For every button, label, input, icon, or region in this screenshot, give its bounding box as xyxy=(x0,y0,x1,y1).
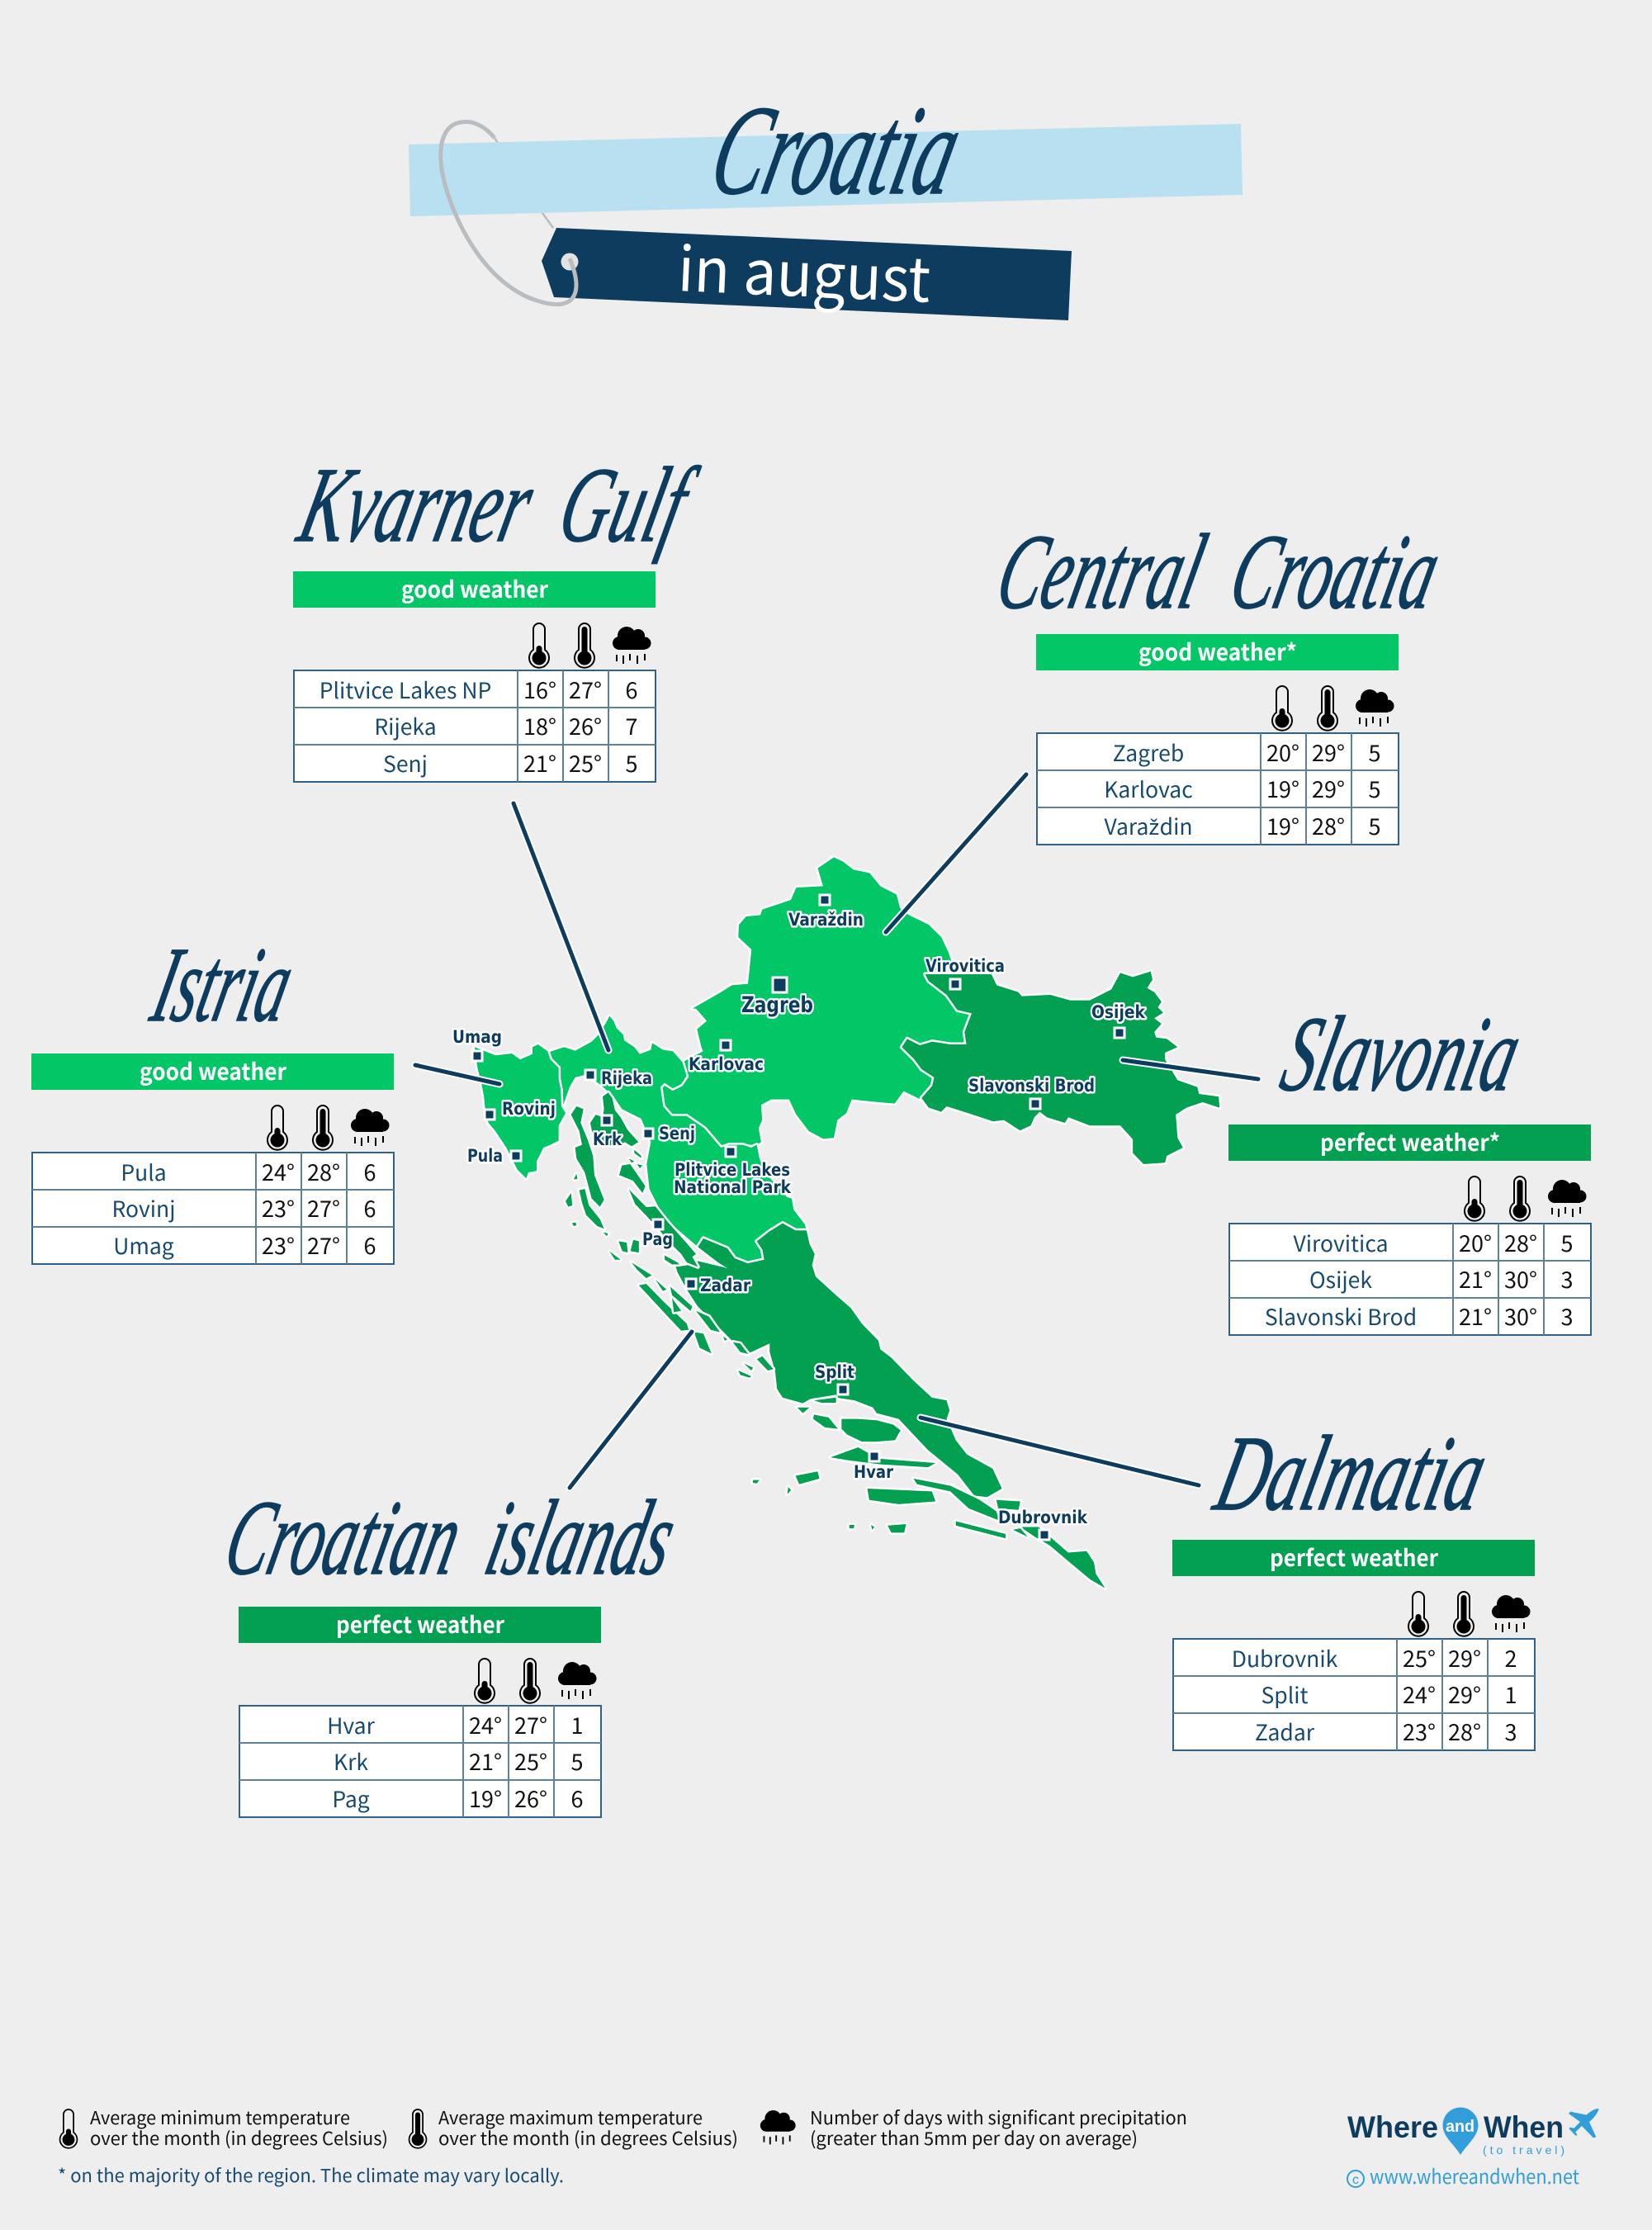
table xyxy=(1229,1224,1591,1335)
city labels: Rijeka xyxy=(601,1068,652,1088)
city labels: Osijek xyxy=(1091,1002,1146,1022)
city labels: Pula xyxy=(467,1146,503,1166)
table: 27° xyxy=(307,1229,340,1261)
legend text: precipitation: Number of days with significant precipitation xyxy=(810,2104,1187,2130)
table: 23° xyxy=(262,1191,295,1224)
table: Rovinj xyxy=(111,1191,176,1224)
table: 29° xyxy=(1312,772,1345,804)
table: 26° xyxy=(514,1782,547,1814)
panel: Croatian islands xyxy=(239,1607,601,1817)
legend icon: maximum temperature xyxy=(409,2109,426,2148)
footnote: * on the majority of the region. The climate may vary locally. xyxy=(58,2161,564,2188)
subtitle tag xyxy=(542,228,1072,320)
leader line: Dalmatia xyxy=(921,1418,1199,1485)
icons xyxy=(1408,1592,1531,1636)
legend text: maximum temperature: over the month (in degrees Celsius) xyxy=(438,2124,738,2151)
leader line: Kvarner Gulf xyxy=(514,803,608,1050)
city labels: Senj xyxy=(659,1124,695,1143)
panel: Kvarner Gulf xyxy=(293,571,656,782)
weather banner xyxy=(293,571,656,608)
leader line: Istria xyxy=(415,1065,499,1084)
region: Kvarner Gulf xyxy=(550,1016,807,1263)
city labels: Slavonski Brod xyxy=(968,1076,1095,1096)
logo: Where and When: and xyxy=(1446,2118,1474,2136)
legend text: precipitation: (greater than 5mm per day on average) xyxy=(810,2124,1138,2151)
table: 5 xyxy=(1369,736,1380,768)
weather banner xyxy=(1036,634,1399,670)
title text: Croatia xyxy=(698,80,974,221)
table: Pag xyxy=(332,1782,370,1814)
table: 6 xyxy=(626,673,637,705)
table xyxy=(1173,1639,1535,1750)
table: 3 xyxy=(1560,1262,1574,1295)
legend icon: precipitation xyxy=(760,2110,796,2144)
table: 5 xyxy=(1369,772,1380,804)
table: Karlovac xyxy=(1104,772,1193,804)
table: 27° xyxy=(307,1191,340,1224)
city labels: Krk xyxy=(593,1129,622,1149)
table: 25° xyxy=(514,1745,547,1777)
table: 3 xyxy=(1504,1715,1517,1747)
table: Zagreb xyxy=(1113,736,1184,768)
weather banner xyxy=(1228,1124,1591,1161)
city labels: Umag xyxy=(452,1027,502,1047)
weather banner xyxy=(1172,1540,1535,1576)
table: 21° xyxy=(1459,1262,1492,1295)
table: 6 xyxy=(363,1191,376,1224)
table: 28° xyxy=(307,1155,340,1187)
heading: Kvarner Gulf: Kvarner Gulf xyxy=(288,445,708,565)
northern islands xyxy=(566,1092,646,1236)
panel: Central Croatia xyxy=(1036,634,1399,845)
subtitle text: in august xyxy=(676,220,933,320)
tag string xyxy=(441,122,576,305)
table: 19° xyxy=(469,1782,502,1814)
table: 24° xyxy=(1403,1678,1436,1710)
weather banner: perfect weather xyxy=(1270,1541,1439,1574)
table: Virovitica xyxy=(1294,1226,1388,1258)
table: 23° xyxy=(1403,1715,1436,1747)
legend text: precipitation xyxy=(810,2104,1187,2151)
table: 30° xyxy=(1504,1262,1537,1295)
city labels: Split xyxy=(815,1362,854,1382)
city labels: Karlovac xyxy=(689,1054,764,1074)
leader line: Croatian islands xyxy=(570,1332,692,1488)
table: 27° xyxy=(569,673,602,705)
table: Pula xyxy=(121,1155,167,1187)
table: 5 xyxy=(571,1745,583,1777)
icons xyxy=(267,1106,390,1150)
table: Krk xyxy=(334,1745,368,1777)
table: 1 xyxy=(571,1708,583,1740)
table: 29° xyxy=(1448,1678,1481,1710)
legend icon: minimum temperature xyxy=(60,2109,77,2148)
city markers xyxy=(472,895,1124,1540)
heading: Istria: Istria xyxy=(141,925,305,1044)
legend text: maximum temperature xyxy=(438,2104,738,2151)
heading: Croatian islands: Croatian islands xyxy=(215,1478,687,1598)
table: 25° xyxy=(569,746,602,779)
table xyxy=(32,1153,394,1264)
legend xyxy=(58,2104,1187,2188)
legend text: minimum temperature xyxy=(90,2104,388,2151)
table: 24° xyxy=(469,1708,502,1740)
icon: map pin xyxy=(1443,2107,1478,2155)
weather banner: perfect weather* xyxy=(1320,1125,1500,1158)
icons xyxy=(475,1659,596,1703)
table: 21° xyxy=(469,1745,502,1777)
panel: Dalmatia xyxy=(1172,1540,1535,1750)
table: 19° xyxy=(1266,809,1299,841)
table: 7 xyxy=(626,709,637,741)
table: 28° xyxy=(1504,1226,1537,1258)
table: 2 xyxy=(1504,1641,1517,1674)
table xyxy=(294,670,656,782)
logo: Where and When xyxy=(1347,2107,1599,2190)
city labels: Virovitica xyxy=(925,956,1005,976)
tag hole xyxy=(561,253,578,271)
table: 27° xyxy=(514,1708,547,1740)
weather banner xyxy=(31,1053,394,1090)
leader line: Slavonia xyxy=(1123,1060,1258,1079)
table: 20° xyxy=(1459,1226,1492,1258)
table: Split xyxy=(1261,1678,1309,1710)
table: 30° xyxy=(1504,1300,1537,1332)
table: Zadar xyxy=(1255,1715,1315,1747)
copyright mark xyxy=(1347,2171,1364,2187)
heading: Dalmatia: Dalmatia xyxy=(1205,1413,1498,1533)
table: 5 xyxy=(626,746,637,779)
table: 29° xyxy=(1312,736,1345,768)
table: 24° xyxy=(262,1155,295,1187)
table: 3 xyxy=(1560,1300,1574,1332)
table: Osijek xyxy=(1309,1262,1372,1295)
table: 6 xyxy=(363,1229,376,1261)
icon: plane xyxy=(1569,2109,1599,2138)
table: 19° xyxy=(1266,772,1299,804)
table: Plitvice Lakes NP xyxy=(320,673,491,705)
logo: Where and When: c xyxy=(1352,2173,1359,2187)
city labels xyxy=(452,910,1146,1527)
city labels: Zagreb xyxy=(741,992,813,1018)
logo: Where and When: www.whereandwhen.net xyxy=(1370,2161,1579,2190)
city labels: Hvar xyxy=(854,1462,894,1482)
city labels: Pag xyxy=(642,1229,673,1249)
region: Dalmatia xyxy=(675,1224,1002,1497)
legend text: maximum temperature: Average maximum temperature xyxy=(438,2104,703,2130)
table: 6 xyxy=(571,1782,583,1814)
table: Senj xyxy=(383,746,428,779)
map of Croatia xyxy=(475,857,1219,1588)
city labels: National Park xyxy=(674,1177,792,1197)
table: 18° xyxy=(523,709,556,741)
table: Rijeka xyxy=(374,709,437,741)
table xyxy=(1037,733,1399,845)
weather banner: good weather* xyxy=(1138,635,1297,668)
table: 16° xyxy=(523,673,556,705)
table: 6 xyxy=(363,1155,376,1187)
icons xyxy=(1272,686,1394,731)
table: 28° xyxy=(1312,809,1345,841)
title banner xyxy=(409,124,1243,216)
southern islands xyxy=(609,1190,1105,1588)
region: central Croatia xyxy=(660,857,972,1148)
table: Varaždin xyxy=(1104,809,1193,841)
region: Slavonia xyxy=(902,972,1219,1164)
table xyxy=(239,1706,601,1817)
table: Umag xyxy=(113,1229,174,1261)
panel: Slavonia xyxy=(1228,1124,1591,1335)
city labels: Zadar xyxy=(700,1276,751,1295)
legend text: minimum temperature: over the month (in degrees Celsius) xyxy=(90,2124,388,2151)
table: 25° xyxy=(1403,1641,1436,1674)
logo: Where and When: Where xyxy=(1347,2110,1438,2144)
table: 21° xyxy=(523,746,556,779)
table: 28° xyxy=(1448,1715,1481,1747)
icons xyxy=(529,623,651,668)
city labels: Rovinj xyxy=(502,1099,556,1119)
weather banner xyxy=(239,1607,601,1643)
city labels: Dubrovnik xyxy=(998,1508,1088,1527)
icons xyxy=(1465,1177,1587,1221)
legend text: minimum temperature: Average minimum temperature xyxy=(90,2104,350,2130)
table: 20° xyxy=(1266,736,1299,768)
table: 29° xyxy=(1448,1641,1481,1674)
title block xyxy=(409,80,1243,320)
table: 5 xyxy=(1560,1226,1574,1258)
weather banner: good weather xyxy=(140,1054,287,1087)
table: 21° xyxy=(1459,1300,1492,1332)
weather banner: good weather xyxy=(401,572,549,605)
logo: Where and When: When xyxy=(1484,2110,1564,2144)
leader line: Central Croatia xyxy=(886,774,1026,932)
table: Dubrovnik xyxy=(1232,1641,1338,1674)
logo: Where and When: (to travel) xyxy=(1483,2143,1564,2157)
region: Istria xyxy=(475,1044,566,1178)
city labels: Varaždin xyxy=(788,910,864,930)
panel: Istria xyxy=(31,1053,394,1264)
table: Hvar xyxy=(327,1708,376,1740)
table: 1 xyxy=(1504,1678,1517,1710)
table: 5 xyxy=(1369,809,1380,841)
table: 23° xyxy=(262,1229,295,1261)
table: Slavonski Brod xyxy=(1265,1300,1417,1332)
weather banner: perfect weather xyxy=(336,1607,505,1641)
table: 26° xyxy=(569,709,602,741)
city labels: Plitvice Lakes xyxy=(675,1160,790,1180)
